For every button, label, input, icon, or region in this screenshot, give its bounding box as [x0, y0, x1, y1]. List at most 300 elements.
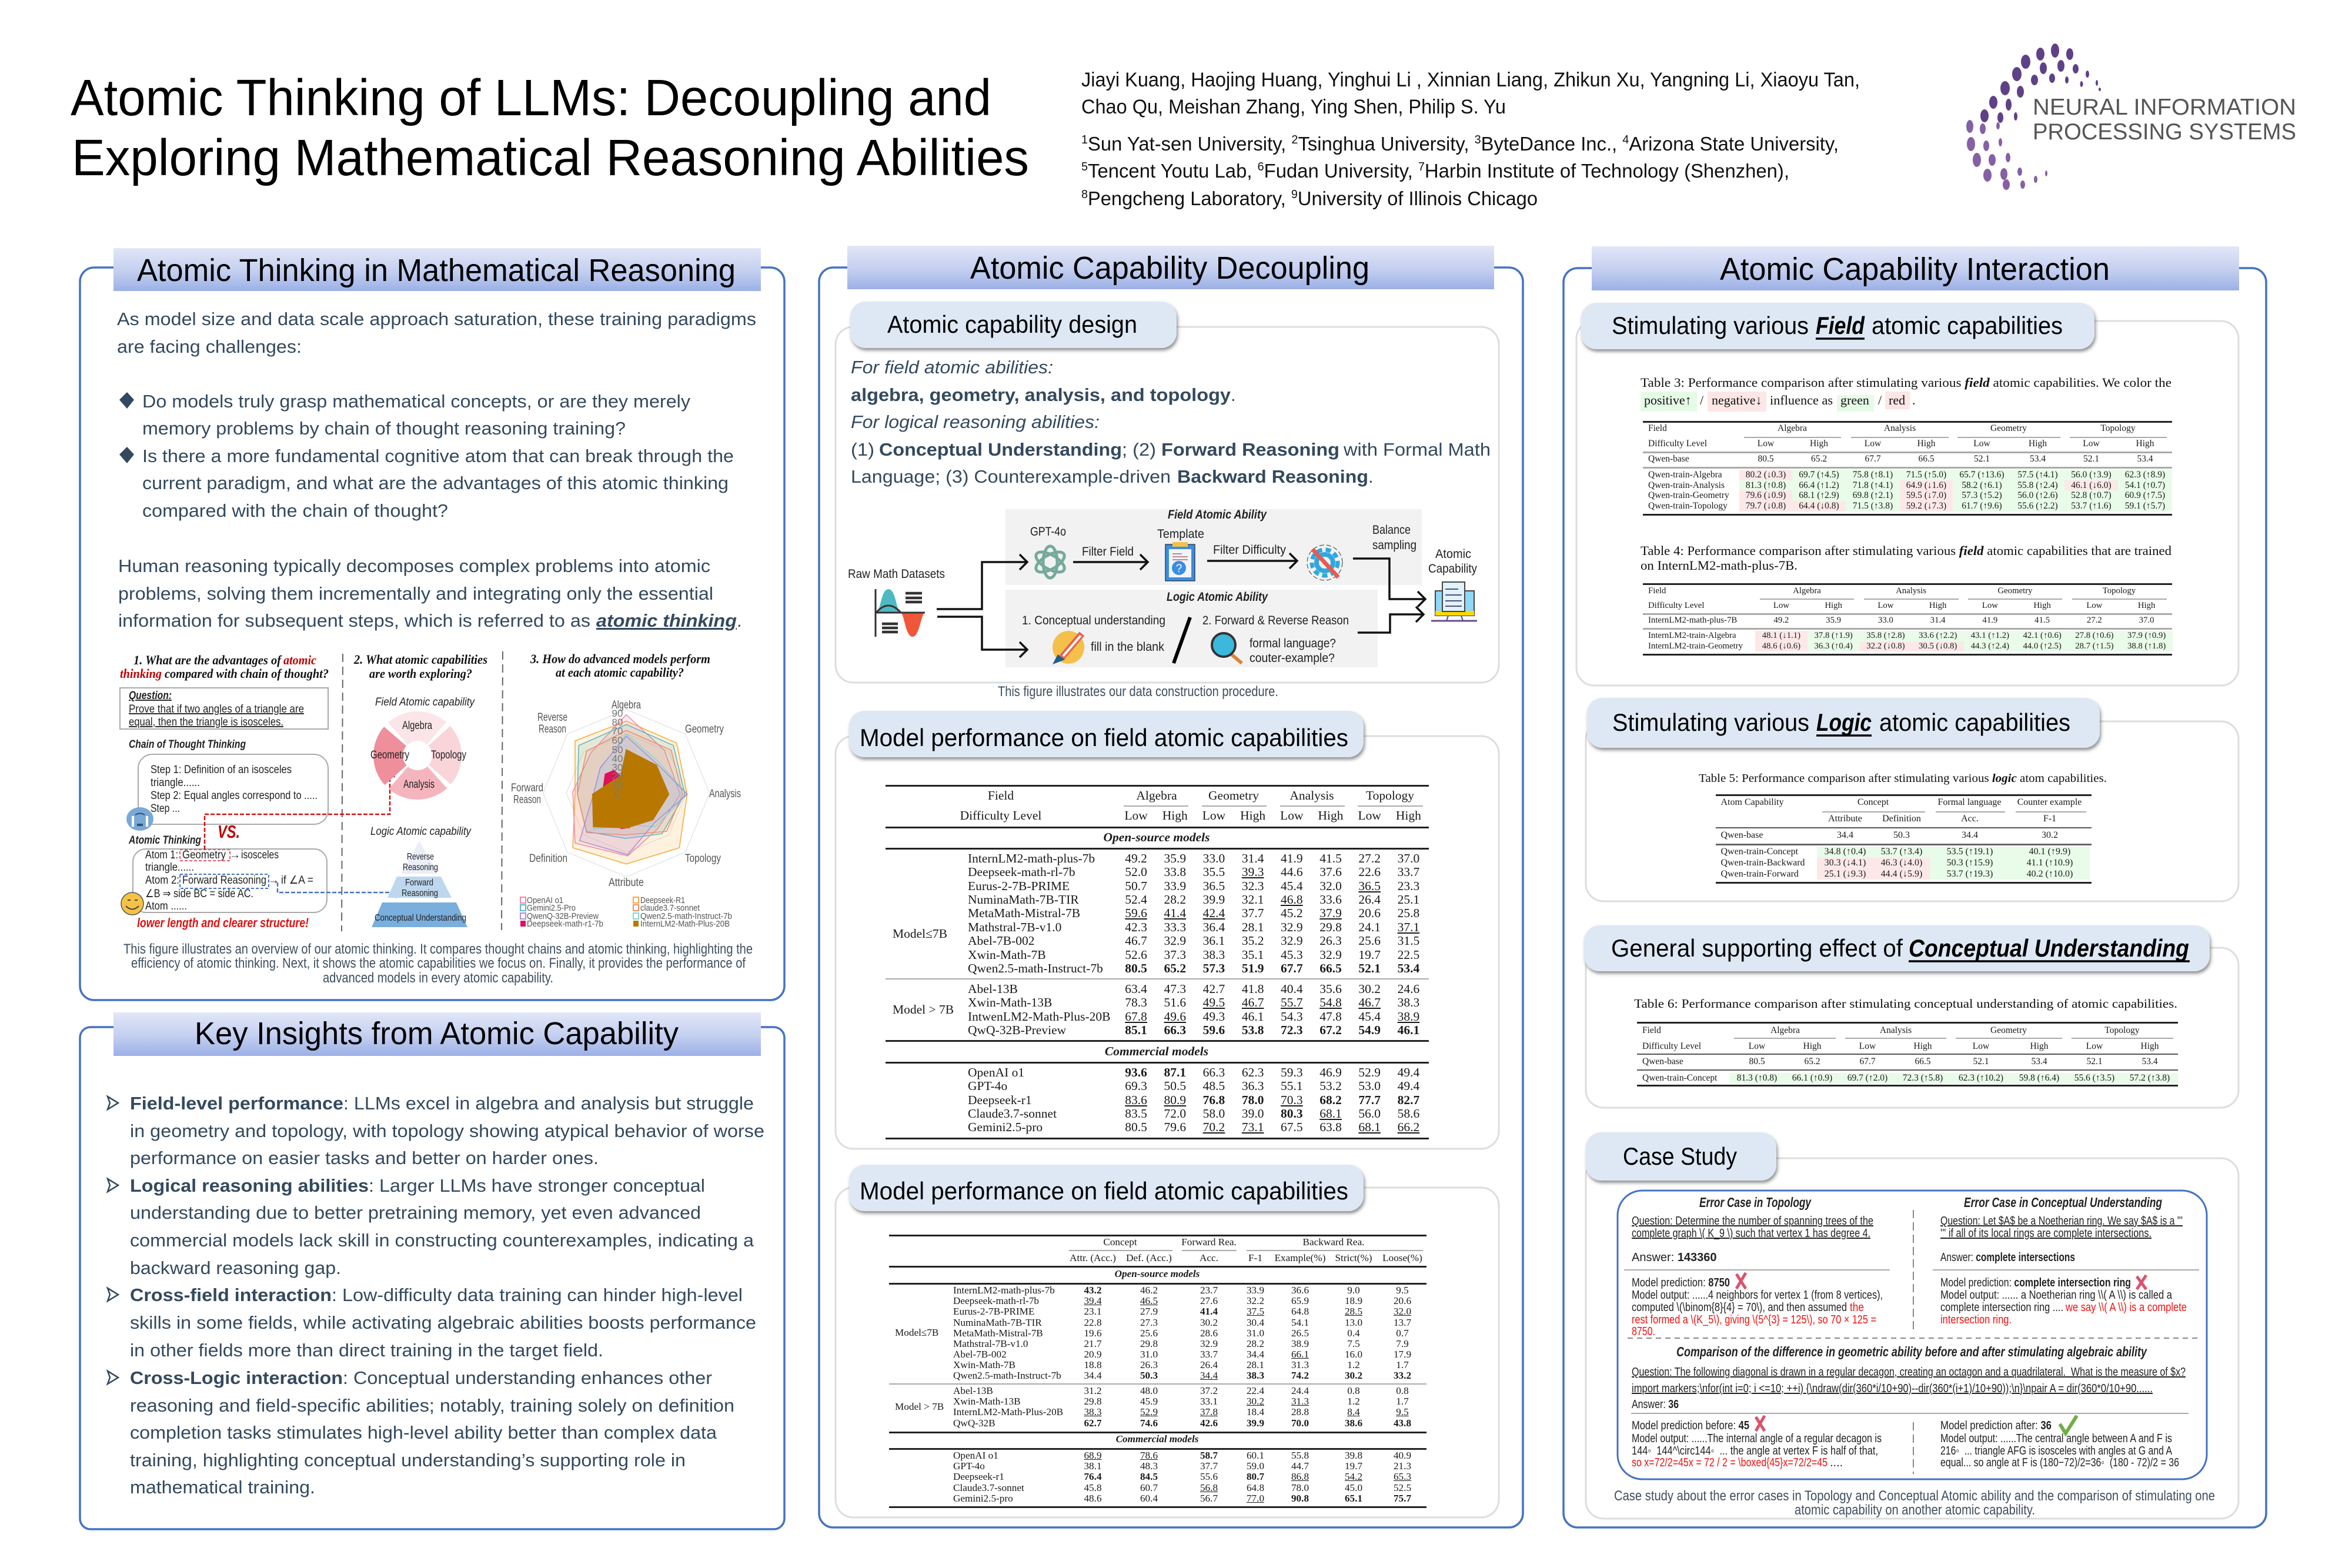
table 6: conceptual understanding effect: 66.5 [1915, 1056, 1931, 1066]
table: field atomic capability performance: 19.7 [1358, 948, 1381, 962]
table: logical reasoning performance: 30.2 [1247, 1396, 1264, 1407]
table: field atomic capability performance: 72.0 [1164, 1106, 1186, 1121]
table 3: stimulating field capabilities: 80.5 [1758, 454, 1774, 464]
table: field atomic capability performance: 50.5 [1164, 1079, 1186, 1093]
table 6: conceptual understanding effect: 53.4 [2031, 1056, 2047, 1066]
text block: design description: . [1231, 385, 1236, 405]
table: field atomic capability performance: 38.3 [1398, 995, 1419, 1009]
table 4: field capabilities on InternLM2: 28.7 (↑1.5) [2075, 641, 2114, 651]
table 3: stimulating field capabilities [1643, 421, 2172, 516]
table 6: conceptual understanding effect: 67.7 [1859, 1056, 1876, 1066]
flow labels: field path: Filter Field [1082, 545, 1134, 559]
table 4: field capabilities on InternLM2: Low [1773, 601, 1789, 610]
atomic thinking box: triangle...... [145, 861, 194, 874]
table: field atomic capability performance: 45.4 [1358, 1009, 1381, 1023]
table 3: stimulating field capabilities: Qwen-base [1648, 454, 1689, 464]
radar chart: Topology [685, 852, 721, 865]
table 5: stimulating logic capabilities: 34.4 [1962, 830, 1978, 840]
logic capability pyramid: Reasoning [403, 862, 438, 872]
text block: design description: ; (2) [1122, 439, 1156, 460]
table 6: conceptual understanding effect: Low [1859, 1041, 1876, 1051]
case: geometry comparison: equal... so angle at F is (180−72)/2=36◦ (180 - 72)/2 = 36 [1940, 1456, 2179, 1469]
table: field atomic capability performance: 29.8 [1319, 920, 1342, 934]
figure part 2 heading: 2. What atomic capabilities [353, 652, 487, 667]
table 3: stimulating field capabilities: Low [2083, 439, 2100, 449]
insight: cross-field interaction: in other fields more than direct training in the target field. [130, 1340, 603, 1360]
radar chart [511, 699, 741, 889]
table: field atomic capability performance: 72.3 [1281, 1023, 1303, 1037]
table: field atomic capability performance: 65.2 [1164, 961, 1186, 975]
table 3 caption: positive↑ [1644, 393, 1692, 407]
field capability donut: Geometry [370, 749, 409, 761]
case: geometry comparison: Model prediction after: 36 [1940, 1419, 2052, 1432]
insight: cross-logic interaction: training, highlighting conceptual understanding’s supporting role in [130, 1450, 686, 1470]
table: logical reasoning performance: 34.4 [1247, 1349, 1264, 1360]
radar chart: 50 [612, 744, 623, 755]
table: field atomic capability performance: 70.3 [1281, 1092, 1303, 1106]
table 3: stimulating field capabilities: 59.1 (↑5.7) [2125, 501, 2165, 511]
radar legend: OpenAI o1 [527, 895, 563, 905]
table 5: stimulating logic capabilities: 53.7 (↑3.4) [1881, 847, 1922, 857]
table: logical reasoning performance: 28.1 [1247, 1359, 1264, 1370]
table 6: conceptual understanding effect: 80.5 [1749, 1056, 1765, 1066]
table: logical reasoning performance: 27.6 [1200, 1295, 1218, 1306]
table: field atomic capability performance: Qwen2.5-math-Instruct-7b [968, 961, 1103, 975]
table: logical reasoning performance: 22.8 [1084, 1317, 1102, 1328]
table: field atomic capability performance: 41.4 [1164, 906, 1186, 920]
table 5: stimulating logic capabilities: Atom Capability [1720, 797, 1784, 807]
table: field atomic capability performance: Low [1280, 808, 1304, 823]
table: field atomic capability performance: 54.9 [1358, 1023, 1381, 1037]
atomic thinking box: if ∠A = [281, 874, 313, 887]
table: field atomic capability performance: 46.1 [1242, 1009, 1264, 1023]
table 3: stimulating field capabilities: Qwen-train-Analysis [1648, 480, 1725, 490]
table: logical reasoning performance: 9.0 [1347, 1285, 1360, 1296]
table: logical reasoning performance: 0.8 [1347, 1385, 1360, 1396]
table 3: stimulating field capabilities: 71.5 (↑5.0) [1906, 470, 1946, 480]
table 4: field capabilities on InternLM2: 33.6 (↑2.2) [1919, 631, 1957, 640]
table 4 caption: on InternLM2-math-plus-7B. [1641, 558, 1798, 573]
table 3: stimulating field capabilities: 52.1 [1974, 454, 1990, 464]
table 4: field capabilities on InternLM2: 30.5 (↓0.8) [1919, 641, 1957, 651]
table: logical reasoning performance: 62.7 [1084, 1417, 1102, 1429]
table: field atomic capability performance: 52.6 [1125, 948, 1147, 962]
table: logical reasoning performance: 54.2 [1345, 1471, 1362, 1482]
figure part 3 heading: at each atomic capability? [556, 665, 684, 680]
radar legend: QwenQ-32B-Preview [527, 911, 599, 921]
table: logical reasoning performance: Forward Rea. [1181, 1236, 1237, 1248]
text block: design description: For logical reasoning abilities: [851, 412, 1100, 432]
radar legend [520, 895, 732, 929]
table: field atomic capability performance: 54.8 [1319, 995, 1342, 1009]
flow label: raw datasets: Raw Math Datasets [848, 567, 945, 581]
text block: question bullets [119, 391, 734, 521]
data construction flow figure [848, 508, 1477, 667]
table 3: stimulating field capabilities: 56.0 (↑3.9) [2071, 470, 2112, 480]
case: error in conceptual understanding [1940, 1195, 2187, 1326]
table: logical reasoning performance: 32.9 [1200, 1338, 1218, 1349]
table: field atomic capability performance: 31.5 [1398, 934, 1419, 948]
panel: atomic thinking in mathematical reasoning [80, 248, 784, 1000]
table 5: stimulating logic capabilities: 53.7 (↑19.3) [1947, 869, 1993, 879]
chain of thought box: Step 1: Definition of an isosceles [151, 764, 292, 776]
table 6: conceptual understanding effect: Geometry [1990, 1025, 2027, 1035]
radar chart: Reverse [537, 711, 567, 724]
affiliations: Sun Yat-sen University, [1088, 133, 1291, 155]
table: logical reasoning performance: QwQ-32B [953, 1417, 995, 1429]
table 3: stimulating field capabilities: Qwen-train-Topology [1648, 501, 1728, 511]
text block: human reasoning [118, 556, 742, 631]
case: geometry comparison: so x=72/2=45x = 72 / 2 = \boxed{45}x=72/2=45 [1632, 1456, 1828, 1469]
table: logical reasoning performance: 1.7 [1396, 1396, 1409, 1407]
table: field atomic capability performance: 53.8 [1242, 1023, 1264, 1037]
table: field atomic capability performance: 67.2 [1319, 1023, 1342, 1037]
affiliations: 4 [1622, 133, 1629, 146]
table 4: field capabilities on InternLM2: 37.9 (↑0.9) [2127, 631, 2166, 640]
table: field atomic capability performance: 20.6 [1358, 906, 1381, 920]
insight: logical reasoning: : Larger LLMs have stronger conceptual [369, 1175, 705, 1196]
table: logical reasoning performance: 30.2 [1345, 1370, 1362, 1381]
insight: field-level performance: performance on easier tasks and better on harder ones. [130, 1148, 599, 1168]
case: error in conceptual understanding: Answer: complete intersections [1940, 1251, 2075, 1264]
table 4: field capabilities on InternLM2: High [1825, 601, 1842, 610]
table: field atomic capability performance: 28.2 [1164, 892, 1186, 907]
table 3: stimulating field capabilities: 65.2 [1811, 454, 1827, 464]
table: field atomic capability performance: 46.1 [1398, 1023, 1419, 1037]
table 4: field capabilities on InternLM2: 41.5 [2034, 616, 2050, 625]
table 6: conceptual understanding effect: 72.3 (↑5.8) [1903, 1072, 1943, 1083]
table: field atomic capability performance: 33.3 [1164, 920, 1186, 934]
insight: cross-logic interaction: Cross-Logic interaction [130, 1368, 343, 1388]
table: field atomic capability performance: 76.8 [1203, 1092, 1225, 1106]
table: logical reasoning performance: OpenAI o1 [953, 1450, 998, 1461]
table 3: stimulating field capabilities: Field [1648, 423, 1667, 433]
table: logical reasoning performance: 0.8 [1396, 1385, 1409, 1396]
case study caption: atomic capability on another atomic capability. [1795, 1502, 2035, 1518]
logo: NeurIPS [1966, 44, 2296, 190]
flow labels: logic path: Logic Atomic Ability [1167, 590, 1268, 604]
table: logical reasoning performance: 23.1 [1084, 1306, 1102, 1317]
table 3: stimulating field capabilities: 80.2 (↓0.3) [1746, 470, 1786, 480]
table: field atomic capability performance: 80.3 [1281, 1106, 1303, 1121]
table: logical reasoning performance: Model > 7B [895, 1401, 944, 1412]
table 4: field capabilities on InternLM2: 37.0 [2139, 616, 2154, 625]
table: field atomic capability performance: 33.7 [1398, 865, 1419, 879]
table: field atomic capability performance: 32.9 [1164, 934, 1186, 948]
pill heading: stimulating logic: Stimulating various [1612, 708, 1809, 736]
table: logical reasoning performance: 44.7 [1291, 1460, 1309, 1472]
insight: field-level performance: : LLMs excel in algebra and analysis but struggle [343, 1093, 754, 1114]
table: field atomic capability performance: 49.2 [1125, 851, 1147, 865]
case: error in topology: Error Case in Topology [1699, 1195, 1812, 1210]
insight: cross-logic interaction: reasoning and field-specific abilities; notably, training solely on definition [130, 1395, 734, 1416]
table 4: field capabilities on InternLM2: InternLM2-math-plus-7B [1648, 616, 1737, 625]
table: logical reasoning performance: 17.9 [1394, 1349, 1411, 1360]
table 3: stimulating field capabilities: Topology [2100, 423, 2136, 433]
table: field atomic capability performance: Gemini2.5-pro [968, 1120, 1043, 1134]
table: field atomic capability performance: 51.6 [1164, 995, 1186, 1009]
table: logical reasoning performance: 9.5 [1396, 1285, 1409, 1296]
table: logical reasoning performance: 26.4 [1200, 1359, 1218, 1370]
table 4: field capabilities on InternLM2: Field [1648, 586, 1666, 596]
table 6: conceptual understanding effect: Difficulty Level [1642, 1041, 1701, 1051]
table: field atomic capability performance: 48.5 [1203, 1079, 1225, 1093]
text block: design description: Forward Reasoning [1161, 439, 1339, 460]
table 4 caption: Table 4: Performance comparison after stimulating various field atomic capabilities that are trained [1641, 543, 2171, 558]
table: field atomic capability performance: Mathstral-7B-v1.0 [968, 920, 1061, 934]
pill heading: stimulating logic: atomic capabilities [1879, 708, 2070, 736]
table: logical reasoning performance: GPT-4o [953, 1460, 985, 1472]
table: logical reasoning performance: 55.8 [1291, 1450, 1309, 1461]
icon: cross mark topology [1736, 1273, 1746, 1289]
poster title [71, 69, 1029, 186]
table: field atomic capability performance: Topology [1366, 788, 1414, 803]
table: logical reasoning performance: 38.3 [1247, 1370, 1264, 1381]
table: field atomic capability performance: 41.9 [1281, 851, 1303, 865]
table: field atomic capability performance: 26.3 [1319, 934, 1342, 948]
radar chart: 60 [612, 735, 623, 746]
table: field atomic capability performance: 63.4 [1125, 982, 1147, 996]
table 4: field capabilities on InternLM2: Difficulty Level [1648, 601, 1704, 610]
table: logical reasoning performance: 30.2 [1200, 1317, 1218, 1328]
table: logical reasoning performance: 48.0 [1140, 1385, 1158, 1396]
table 4: field capabilities on InternLM2: 35.8 (↑2.8) [1866, 631, 1905, 640]
table: logical reasoning performance: 41.4 [1200, 1306, 1218, 1317]
table: logical reasoning performance: 48.6 [1084, 1493, 1102, 1504]
pill heading: capability design: Atomic capability design [887, 310, 1137, 338]
table: logical reasoning performance: 20.6 [1394, 1295, 1411, 1306]
table: field atomic capability performance: 46.7 [1358, 995, 1381, 1009]
table: logical reasoning performance: 45.9 [1140, 1396, 1158, 1407]
table: field atomic capability performance: High [1240, 808, 1265, 823]
icon: cross mark before [1756, 1416, 1765, 1431]
figure caption: efficiency of atomic thinking. Next, it shows the atomic capabilities we focus on. Finally, it provides the performance of [131, 955, 746, 971]
flow labels: logic path: fill in the blank [1091, 640, 1164, 654]
table 5: stimulating logic capabilities: Qwen-base [1720, 830, 1763, 840]
table 4: field capabilities on InternLM2: 27.8 (↑0.6) [2075, 631, 2114, 640]
table: logical reasoning performance: 52.5 [1394, 1482, 1411, 1493]
table: field atomic capability performance: 35.5 [1203, 865, 1225, 879]
table 5: stimulating logic capabilities: 30.3 (↓4.1) [1825, 858, 1866, 868]
case: error in topology: 8750. [1632, 1325, 1655, 1338]
table 5 caption: Table 5: Performance comparison after stimulating various logic atom capabilities. [1699, 772, 2107, 785]
table: logical reasoning performance: 33.1 [1200, 1396, 1218, 1407]
affiliations: 3 [1475, 133, 1481, 146]
atomic thinking box: Geometry [182, 849, 226, 861]
table 6: conceptual understanding effect: High [2140, 1041, 2159, 1051]
table: logical reasoning performance: 64.8 [1247, 1482, 1264, 1493]
case: error in topology: computed \(\binom{8}{4} = 70\), and then assumed [1632, 1301, 1847, 1314]
question box [120, 688, 328, 729]
table: field atomic capability performance: 35.9 [1164, 851, 1186, 865]
insight: cross-logic interaction: : Conceptual understanding enhances other [343, 1368, 712, 1388]
table: field atomic capability performance: NuminaMath-7B-TIR [968, 892, 1079, 907]
table: field atomic capability performance: 53.0 [1358, 1079, 1381, 1093]
table: field atomic capability performance: 42.3 [1125, 920, 1147, 934]
insight: logical reasoning: backward reasoning gap. [130, 1258, 341, 1278]
table: logical reasoning performance: MetaMath-Mistral-7B [953, 1328, 1043, 1339]
table: field atomic capability performance: 24.6 [1398, 982, 1419, 996]
radar chart: Reason [539, 723, 566, 735]
table: logical reasoning performance: 7.9 [1396, 1338, 1409, 1349]
question box: Question: [129, 690, 172, 702]
table: field atomic capability performance: 78.0 [1242, 1092, 1264, 1106]
table 6: conceptual understanding effect: High [1803, 1041, 1822, 1051]
table: logical reasoning performance: 37.7 [1200, 1460, 1218, 1472]
table 3: stimulating field capabilities: 68.1 (↑2.9) [1799, 490, 1839, 500]
table: field atomic capability performance: 38.9 [1398, 1009, 1419, 1023]
radar chart: Geometry [685, 723, 724, 735]
table: logical reasoning performance: 0.4 [1347, 1328, 1360, 1339]
table: logical reasoning performance: 27.9 [1140, 1306, 1158, 1317]
table: field atomic capability performance: 26.4 [1358, 892, 1381, 907]
table: field atomic capability performance: 66.2 [1398, 1120, 1419, 1134]
table: logical reasoning performance: 60.7 [1140, 1482, 1158, 1493]
text block: human reasoning: problems, solving them incrementally and integrating only the essential [118, 583, 713, 604]
table: field atomic capability performance: 49.5 [1203, 995, 1225, 1009]
table 3 caption: negative↓ [1712, 393, 1762, 407]
table 6: conceptual understanding effect: 53.4 [2141, 1056, 2158, 1066]
text block: human reasoning: atomic thinking [596, 610, 737, 631]
table: field atomic capability performance: 58.6 [1398, 1106, 1419, 1121]
table 6: conceptual understanding effect: 57.2 (↑3.8) [2130, 1072, 2170, 1083]
table: logical reasoning performance: 54.1 [1291, 1317, 1309, 1328]
table: field atomic capability performance: 82.7 [1398, 1092, 1419, 1106]
table: logical reasoning performance: 86.8 [1291, 1471, 1309, 1482]
table 3: stimulating field capabilities: Algebra [1778, 423, 1807, 433]
insight: cross-field interaction: skills in some fields, while activating algebraic abilities boosts performance [130, 1312, 756, 1333]
radar chart: 80 [612, 717, 623, 728]
table 5: stimulating logic capabilities: 53.5 (↑19.1) [1947, 847, 1993, 857]
table: field atomic capability performance: 55.1 [1281, 1079, 1303, 1093]
table: field atomic capability performance: Analysis [1289, 788, 1334, 803]
table: logical reasoning performance: 32.0 [1394, 1306, 1411, 1317]
table 6 caption: Table 6: Performance comparison after stimulating conceptual understanding of atomic capabilities. [1634, 997, 2177, 1011]
table 6: conceptual understanding effect [1637, 1022, 2178, 1086]
table: field atomic capability performance: 49.3 [1203, 1009, 1225, 1023]
radar chart: 90 [612, 708, 623, 719]
arrow: forward reasoning to logic capability [278, 882, 401, 898]
table 4: field capabilities on InternLM2: Algebra [1793, 586, 1821, 596]
icon: template clipboard [1165, 542, 1195, 581]
table: field atomic capability performance: Low [1124, 808, 1148, 823]
text block: challenges intro: As model size and data scale approach saturation, these training paradigms [117, 309, 756, 329]
table 6: conceptual understanding effect: Algebra [1770, 1025, 1800, 1035]
table: field atomic capability performance: 68.2 [1319, 1092, 1342, 1106]
table 3: stimulating field capabilities: 66.5 [1918, 454, 1935, 464]
table: field atomic capability performance: Model≤7B [893, 927, 947, 941]
table: field atomic capability performance: 38.3 [1203, 948, 1225, 962]
table 3: stimulating field capabilities: 66.4 (↑1.2) [1799, 480, 1839, 490]
table 3: stimulating field capabilities: 60.9 (↑7.5) [2125, 490, 2165, 500]
table: field atomic capability performance: 52.1 [1358, 961, 1381, 975]
pill heading: stimulating field: Field [1816, 312, 1865, 339]
table 4 caption [1641, 543, 2171, 573]
case: geometry comparison: import markers;\nfor(int i=0; i <=10; ++i) {\ndraw(dir(360*i/10+90)--dir(360*(i+1)/10+90));\n}\npair A = dir(360*0/10+90...... [1632, 1382, 2153, 1395]
table 4: field capabilities on InternLM2: 43.1 (↑1.2) [1971, 631, 2009, 640]
table: field atomic capability performance: 30.2 [1358, 982, 1381, 996]
pill heading: field performance [849, 711, 1364, 757]
table: logical reasoning performance: 23.7 [1200, 1285, 1218, 1296]
table: field atomic capability performance: GPT-4o [968, 1079, 1007, 1093]
table: logical reasoning performance: Deepseek-r1 [953, 1471, 1004, 1482]
insight: field-level performance: in geometry and topology, with topology showing atypical behavior of worse [130, 1121, 764, 1141]
table 6: conceptual understanding effect: 65.2 [1804, 1056, 1820, 1066]
table 3: stimulating field capabilities: High [1810, 439, 1828, 449]
table: logical reasoning performance: 68.9 [1084, 1450, 1102, 1461]
table: field atomic capability performance: 25.8 [1398, 906, 1419, 920]
table: logical reasoning performance: 46.2 [1140, 1285, 1158, 1296]
atomic thinking box: Atom 1: [145, 849, 178, 861]
table: logical reasoning performance: 28.2 [1247, 1338, 1264, 1349]
table 6: conceptual understanding effect: 66.1 (↑0.9) [1792, 1072, 1832, 1083]
table 3 caption: . [1912, 393, 1916, 407]
table: logical reasoning performance: 55.6 [1200, 1471, 1218, 1482]
table: logical reasoning performance: 31.0 [1140, 1349, 1158, 1360]
figure part 3 heading: 3. How do advanced models perform [530, 651, 710, 666]
flow labels: field path: Template [1157, 527, 1204, 541]
table 3 caption: red [1889, 393, 1905, 407]
table: field atomic capability performance [886, 785, 1429, 1139]
table: field atomic capability performance: 62.3 [1242, 1065, 1264, 1079]
chain of thought box: Chain of Thought Thinking [129, 738, 246, 751]
table: logical reasoning performance: 76.4 [1084, 1471, 1102, 1482]
table: logical reasoning performance: Backward Rea. [1303, 1236, 1364, 1248]
insight: cross-field interaction: Cross-field interaction [130, 1285, 332, 1305]
text block: design description: (1) [851, 439, 874, 460]
table: logical reasoning performance: 30.4 [1247, 1317, 1264, 1328]
table: logical reasoning performance: 27.3 [1140, 1317, 1158, 1328]
table: field atomic capability performance: High [1318, 808, 1344, 823]
table: field atomic capability performance: 45.3 [1281, 948, 1303, 962]
table: field atomic capability performance: 87.1 [1164, 1065, 1186, 1079]
table: field atomic capability performance: 32.9 [1281, 920, 1303, 934]
icon: template clipboard: ? [1176, 563, 1182, 575]
table 4: field capabilities on InternLM2: 31.4 [1930, 616, 1946, 625]
table: field atomic capability performance: 32.1 [1242, 892, 1264, 907]
table: field atomic capability performance: 55.7 [1281, 995, 1303, 1009]
table: logical reasoning performance: 52.9 [1140, 1406, 1158, 1417]
table 6: conceptual understanding effect: Qwen-train-Concept [1642, 1072, 1717, 1083]
table: field atomic capability performance: 49.4 [1398, 1079, 1419, 1093]
radar legend: InternLM2-Math-Plus-20B [640, 919, 730, 929]
table: field atomic capability performance: 28.1 [1242, 920, 1264, 934]
flow labels: field path: sampling [1372, 539, 1416, 552]
insight: logical reasoning [108, 1175, 754, 1278]
table: field atomic capability performance: 25.6 [1358, 934, 1381, 948]
case: error in topology [1632, 1195, 1883, 1338]
case: geometry comparison: Model output: ......The central angle between A and F is [1940, 1432, 2172, 1445]
table: logical reasoning performance: F-1 [1248, 1252, 1262, 1263]
table: logical reasoning performance: 65.3 [1394, 1471, 1411, 1482]
table: logical reasoning performance: 39.9 [1247, 1417, 1264, 1429]
pill heading: stimulating logic: Logic [1816, 708, 1872, 736]
table 6: conceptual understanding effect: High [2030, 1041, 2049, 1051]
table: field atomic capability performance: Model > 7B [893, 1002, 954, 1017]
logic capability pyramid [370, 825, 472, 927]
table: logical reasoning performance: 43.2 [1084, 1285, 1102, 1296]
table: field atomic capability performance: 57.3 [1203, 961, 1225, 975]
figure part 1 heading: thinking [120, 666, 162, 681]
table: logical reasoning performance: 78.0 [1291, 1482, 1309, 1493]
text block: design description: Language; (3) Counterexample-driven [851, 466, 1171, 487]
table: logical reasoning performance: 13.0 [1345, 1317, 1362, 1328]
table 3: stimulating field capabilities: High [2029, 439, 2047, 449]
logic capability pyramid: Reverse [407, 852, 434, 862]
table: field atomic capability performance: 36.5 [1358, 878, 1381, 892]
table: field atomic capability performance: OpenAI o1 [968, 1065, 1024, 1079]
logo: NeurIPS: NEURAL INFORMATION [2033, 95, 2296, 120]
